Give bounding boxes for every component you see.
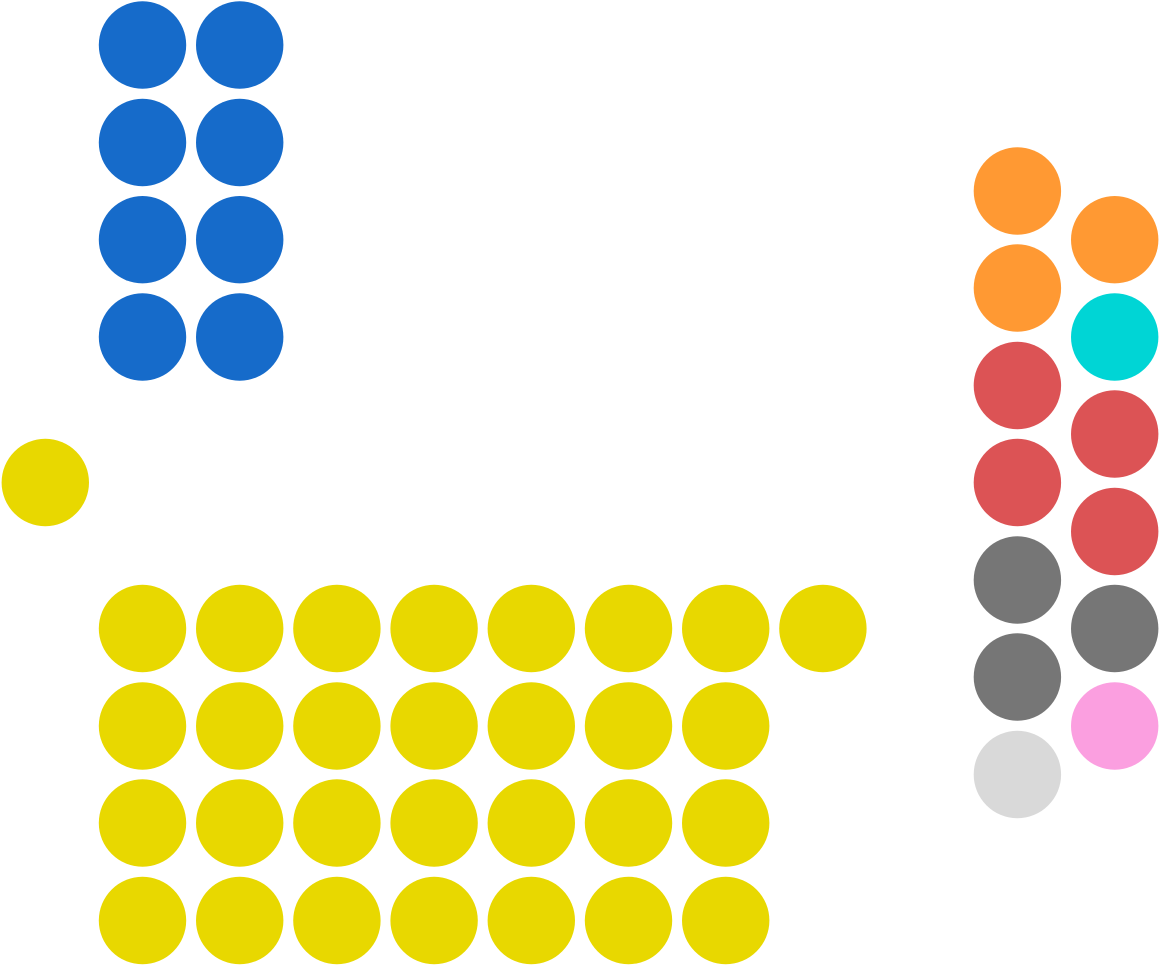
- seat group: yellow party: [99, 585, 867, 964]
- seat group: red party: [974, 342, 1158, 575]
- seat group: grey party: [974, 536, 1158, 721]
- seat: pink party: [1071, 682, 1158, 770]
- seat: lone yellow seat: [2, 439, 89, 526]
- seat group: orange party: [974, 147, 1158, 332]
- seat: light grey party: [974, 731, 1061, 818]
- seat group: blue party: [99, 1, 283, 381]
- seat: cyan party: [1071, 293, 1158, 381]
